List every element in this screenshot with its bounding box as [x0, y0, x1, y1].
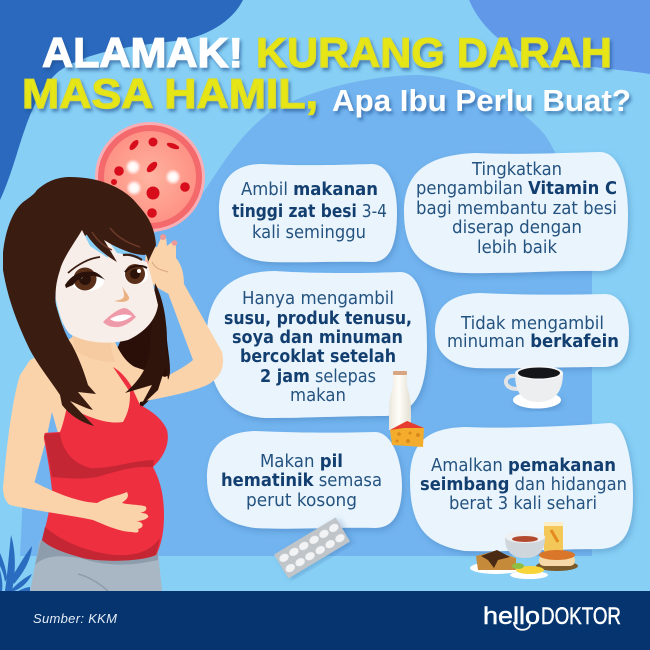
footer bar: [0, 591, 650, 650]
title: MASA HAMIL,: [22, 70, 318, 117]
panel: caffeine tip: [435, 293, 629, 368]
panel: hematinic pill tip: Makan pil: [260, 452, 343, 472]
panel: dairy timing tip: makan: [290, 386, 346, 406]
panel: balanced diet tip: seimbang dan hidangan: [420, 475, 627, 495]
woman illustration: [3, 177, 223, 591]
icon: milk bottle: [389, 371, 411, 430]
red top: [42, 367, 168, 561]
icon: red blood cells circle: [95, 122, 205, 232]
panel: dairy timing tip: [207, 271, 427, 418]
nose: [114, 286, 129, 302]
torso and raised arm: [3, 284, 223, 490]
eyes: [65, 264, 148, 291]
raised hand: [144, 234, 184, 294]
pants: [30, 540, 162, 591]
panel: dairy timing tip: soya dan minuman: [232, 328, 403, 348]
logo: helloDOKTOR: hello: [483, 603, 540, 630]
panel: vitamin C tip: [404, 152, 628, 273]
panel: hematinic pill tip: hematinik semasa: [221, 471, 382, 491]
neck: [72, 330, 116, 362]
panel: iron-rich food tip: kali seminggu: [252, 223, 366, 243]
panel: balanced diet tip: berat 3 kali sehari: [449, 494, 597, 514]
title: Apa Ibu Perlu Buat?: [332, 83, 631, 118]
icon: cheese: [390, 421, 424, 447]
title: [22, 29, 631, 118]
panel: vitamin C tip: lebih baik: [477, 238, 558, 258]
hair behind: [112, 310, 170, 408]
title: ALAMAK!: [42, 29, 243, 76]
icon: pill blister pack: [274, 517, 350, 579]
panel: dairy timing tip: Hanya mengambil: [242, 289, 394, 309]
mouth: [103, 308, 136, 327]
panel: dairy timing tip: bercoklat setelah: [240, 347, 396, 367]
panel: vitamin C tip: pengambilan Vitamin C: [416, 179, 617, 199]
face: [56, 227, 158, 343]
source credit: Sumber: KKM: [33, 611, 117, 626]
plant: [0, 535, 32, 591]
icon: coffee cup: [506, 366, 563, 408]
logo: helloDOKTOR: [483, 603, 621, 630]
panel: dairy timing tip: susu, produk tenusu,: [224, 309, 412, 329]
panel: hematinic pill tip: perut kosong: [246, 491, 357, 511]
front hair right locks: [125, 283, 170, 407]
panel: dairy timing tip: 2 jam selepas: [260, 367, 376, 387]
panel: vitamin C tip: diserap dengan: [452, 218, 582, 238]
panel: vitamin C tip: Tingkatkan: [471, 160, 562, 180]
title: KURANG DARAH: [256, 29, 612, 76]
panel: vitamin C tip: bagi membantu zat besi: [416, 199, 617, 219]
lower arm on belly: [3, 370, 148, 533]
icon: balanced meal: [470, 522, 578, 579]
panel: caffeine tip: minuman berkafein: [447, 332, 619, 352]
panel: balanced diet tip: Amalkan pemakanan: [431, 456, 616, 476]
logo: helloDOKTOR: DOKTOR: [541, 603, 621, 630]
panel: iron-rich food tip: Ambil makanan: [241, 180, 378, 200]
panel: caffeine tip: Tidak mengambil: [460, 314, 604, 334]
hair main: [3, 177, 156, 426]
panel: hematinic pill tip: [207, 431, 402, 529]
panel: iron-rich food tip: tinggi zat besi 3-4: [232, 202, 387, 222]
panel: iron-rich food tip: [219, 164, 397, 262]
panel: balanced diet tip: [410, 423, 633, 551]
